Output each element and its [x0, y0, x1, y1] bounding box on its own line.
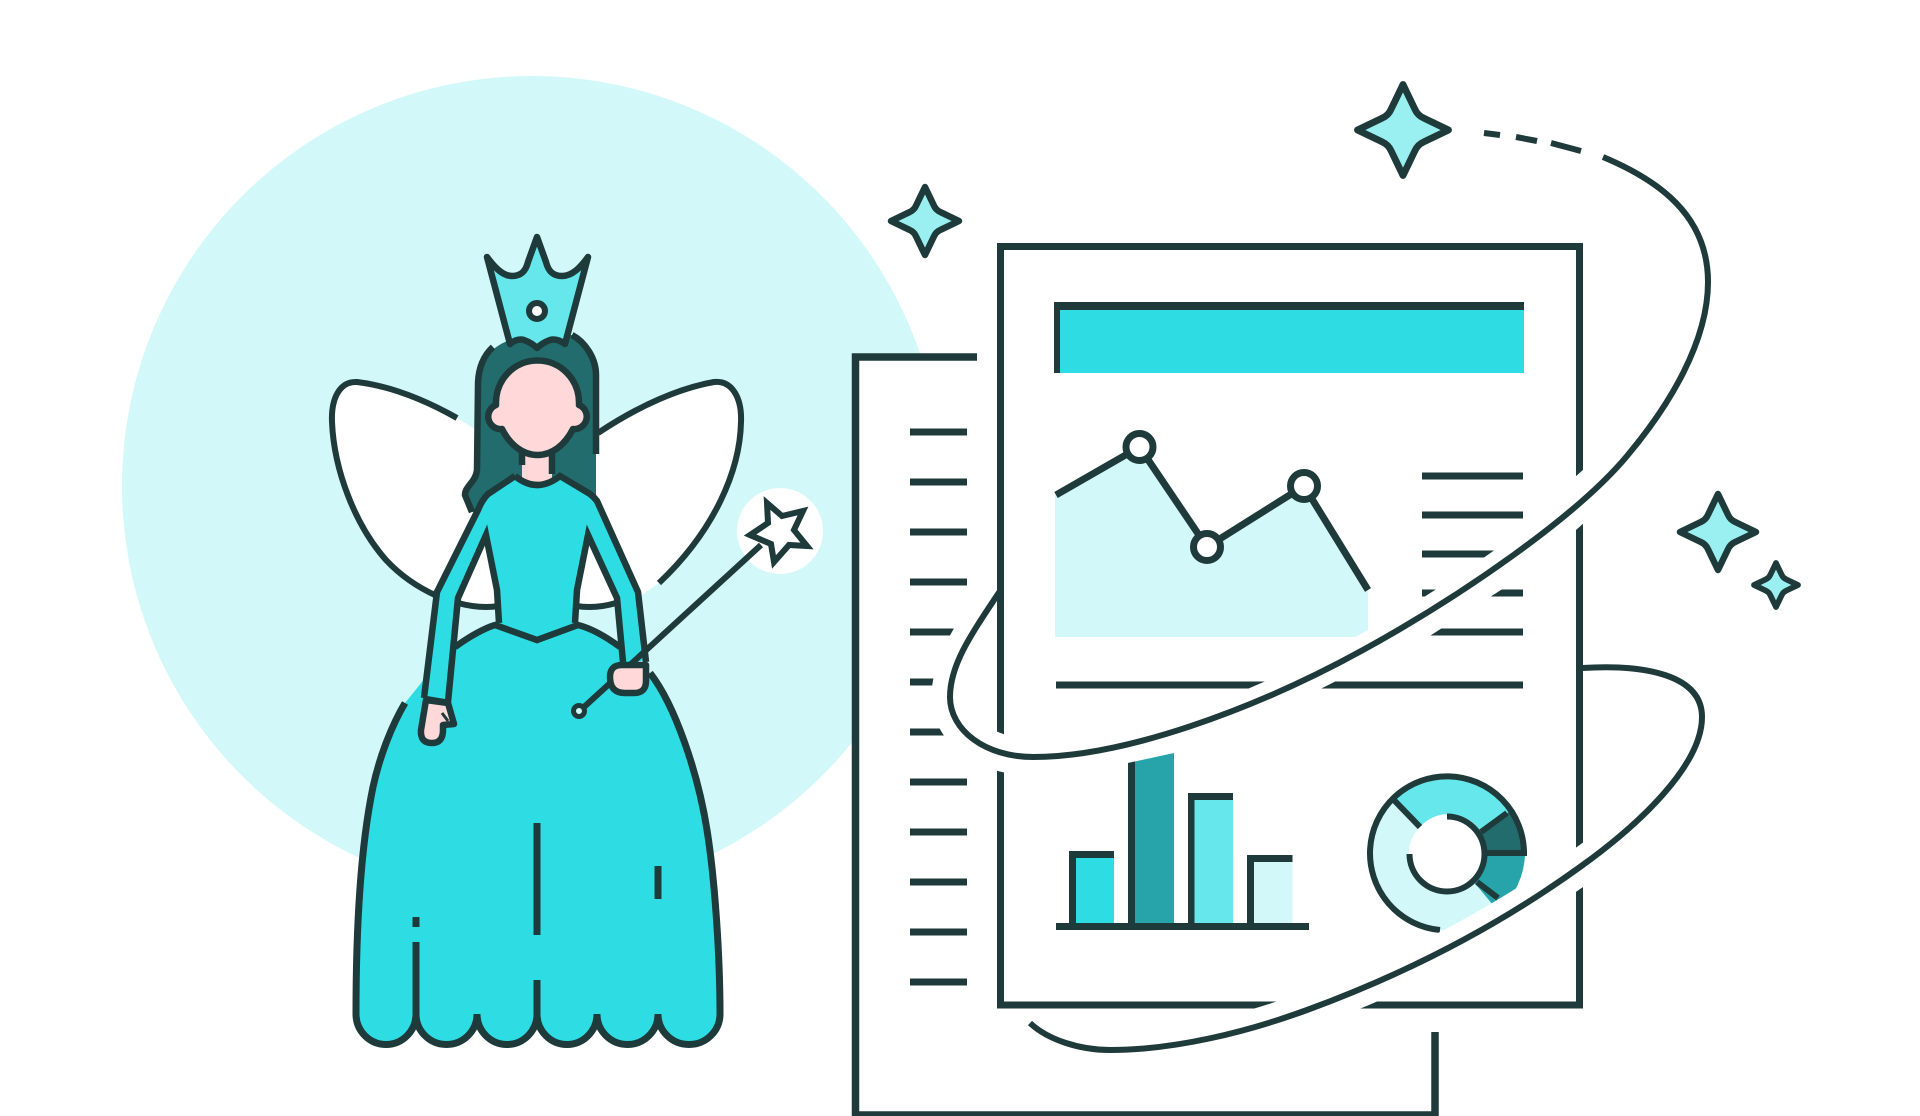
orbit line lower: [1030, 667, 1702, 1050]
bar 1: [1069, 851, 1114, 926]
skirt: [356, 625, 720, 1044]
segment: light: [1370, 798, 1498, 930]
bar 2: [1128, 753, 1174, 926]
face with ears: [488, 360, 587, 455]
hair: [465, 335, 596, 512]
magic wand: [574, 488, 823, 716]
donut outlines: [1370, 776, 1527, 930]
left wing: [332, 382, 500, 608]
crown: [487, 237, 588, 348]
dress bodice and arms: [424, 476, 646, 703]
background circle: [122, 76, 942, 896]
donut chart: [1370, 776, 1527, 930]
right hand: [610, 665, 646, 693]
segment: aqua: [1392, 777, 1510, 832]
left hand: [421, 700, 454, 743]
main document: [1000, 246, 1580, 1005]
right wing: [575, 382, 741, 608]
header bar: [1054, 302, 1524, 373]
fairy character: [332, 237, 823, 1044]
orbit line upper: [950, 133, 1708, 757]
bar 3: [1188, 793, 1233, 926]
line chart: [1055, 434, 1368, 637]
sparkle right small: [1754, 563, 1798, 607]
neck: [522, 450, 552, 482]
sparkle top left: [891, 187, 959, 255]
text lines: [910, 432, 967, 982]
back document: [856, 357, 1440, 1116]
text lines right of chart: [1056, 476, 1523, 685]
sparkle right: [1680, 494, 1756, 570]
sparkle top large: [1358, 84, 1448, 176]
segment: teal: [1473, 853, 1525, 911]
dashed trail: [1484, 133, 1581, 151]
segment: dark teal: [1481, 811, 1525, 853]
bar 4: [1247, 855, 1292, 926]
bar chart: [1056, 753, 1309, 926]
